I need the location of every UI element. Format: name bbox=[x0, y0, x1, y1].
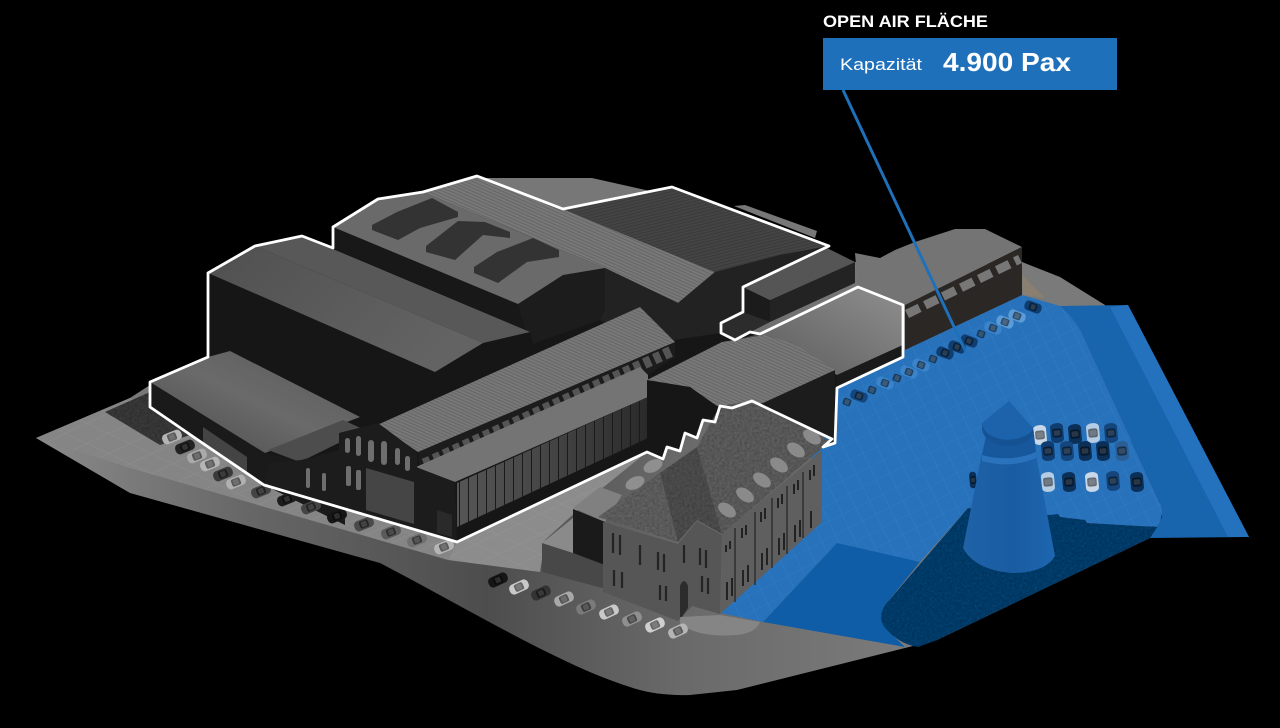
rear hall corrugated roof bbox=[423, 176, 715, 303]
east building bbox=[855, 229, 1022, 350]
block right wall bbox=[752, 370, 835, 442]
gable dark door bbox=[437, 510, 452, 537]
left tall hall bbox=[208, 236, 533, 420]
tower roof bbox=[982, 401, 1033, 440]
upper hall bbox=[333, 192, 605, 345]
skylight 1 bbox=[372, 198, 458, 240]
parked cars along plaza bbox=[837, 299, 1043, 410]
lean-to roof bbox=[268, 420, 365, 462]
side wall bbox=[720, 450, 822, 614]
white venue outline bbox=[150, 176, 903, 542]
low annex top bbox=[542, 518, 573, 553]
light plaza surface bbox=[720, 295, 1162, 622]
side dormers bbox=[715, 426, 824, 521]
left hall roof front slope bbox=[208, 246, 483, 372]
side windows lower bbox=[727, 511, 811, 600]
front windows bbox=[613, 533, 708, 601]
main roof slope bbox=[697, 401, 830, 534]
parked cars south row bbox=[487, 571, 689, 640]
gable wall bbox=[264, 423, 457, 542]
tower collar rim bbox=[982, 452, 1036, 464]
callout box bbox=[823, 38, 1117, 90]
east building windows bbox=[907, 259, 1020, 314]
long front hall bbox=[377, 307, 675, 527]
block left wall bbox=[647, 380, 717, 459]
main complex mass bbox=[150, 176, 903, 542]
callout heading: OPEN AIR FLÄCHE bbox=[823, 12, 988, 31]
side windows upper bbox=[726, 465, 814, 552]
upper hall front wall bbox=[333, 227, 530, 332]
block roof bbox=[647, 335, 835, 408]
rear dormers bbox=[623, 456, 665, 493]
dark shaded ground bbox=[881, 508, 1157, 647]
outer strip bbox=[1060, 305, 1249, 538]
upper annex dark block bbox=[573, 509, 605, 565]
plaza: open air area bbox=[720, 295, 1249, 647]
annex right wall bbox=[770, 262, 855, 322]
east hall roof bbox=[760, 287, 903, 375]
ground plot bbox=[36, 220, 1150, 695]
mid-blue apron bbox=[763, 543, 920, 647]
outer edge strip bbox=[1110, 305, 1249, 537]
tower roof rim bbox=[982, 423, 1034, 446]
capacity label: Kapazität bbox=[840, 55, 922, 74]
gable glazed entrance bbox=[366, 468, 414, 524]
annex roof bbox=[743, 248, 855, 300]
long hall corrugated roof bbox=[377, 307, 675, 452]
parked cars west row bbox=[161, 428, 455, 556]
upper hall gable wall bbox=[518, 268, 605, 345]
low west hall bbox=[150, 351, 365, 525]
east hall wall bbox=[837, 345, 903, 388]
east building roof bbox=[855, 229, 1022, 305]
upper hall roof bbox=[333, 192, 605, 304]
upper annex top bbox=[573, 487, 622, 522]
left hall wall bbox=[208, 273, 533, 420]
annex left wall bbox=[743, 287, 770, 322]
courtyard paving bbox=[448, 452, 647, 572]
skylight 2 bbox=[426, 221, 510, 260]
long hall window band bbox=[418, 342, 675, 475]
tower collar bbox=[982, 434, 1036, 458]
skylight 3 bbox=[474, 238, 559, 283]
glass facade bbox=[457, 397, 648, 527]
front wall bbox=[603, 521, 722, 621]
rear roofs behind outline bbox=[480, 178, 1105, 306]
leader line bbox=[843, 90, 978, 378]
gable arched windows bbox=[306, 436, 410, 491]
tower bbox=[963, 401, 1055, 573]
left hall roof back slope bbox=[255, 236, 530, 343]
low hall glazing bbox=[203, 427, 247, 472]
left hip slope bbox=[598, 473, 678, 542]
annex lower roof bbox=[721, 312, 770, 340]
lean-to corrugated roof bbox=[416, 367, 648, 482]
west gable facade bbox=[264, 423, 457, 542]
corner forecourt bbox=[680, 615, 760, 636]
east hall inside outline bbox=[660, 287, 903, 388]
rear hall dark roof bbox=[563, 187, 829, 272]
pavement west bbox=[36, 398, 457, 560]
east building wall bbox=[905, 247, 1022, 350]
middle hip slope bbox=[660, 447, 722, 542]
corrugated gable block bbox=[647, 335, 835, 459]
capacity value: 4.900 Pax bbox=[943, 47, 1072, 77]
tower body bbox=[963, 450, 1055, 573]
historic brick building bbox=[542, 401, 830, 621]
small annex block bbox=[721, 248, 855, 340]
parked cars block on plaza bbox=[969, 423, 1144, 492]
low annex wall bbox=[542, 543, 610, 590]
long hall arches bbox=[424, 351, 672, 464]
side wall pilasters bbox=[735, 472, 803, 602]
front arched door bbox=[680, 581, 688, 620]
low hall roof bbox=[150, 351, 360, 453]
rear hall gable wall bbox=[600, 246, 829, 345]
planted patch bbox=[105, 392, 190, 445]
link roof bbox=[660, 334, 837, 378]
low hall wall bbox=[150, 382, 345, 525]
